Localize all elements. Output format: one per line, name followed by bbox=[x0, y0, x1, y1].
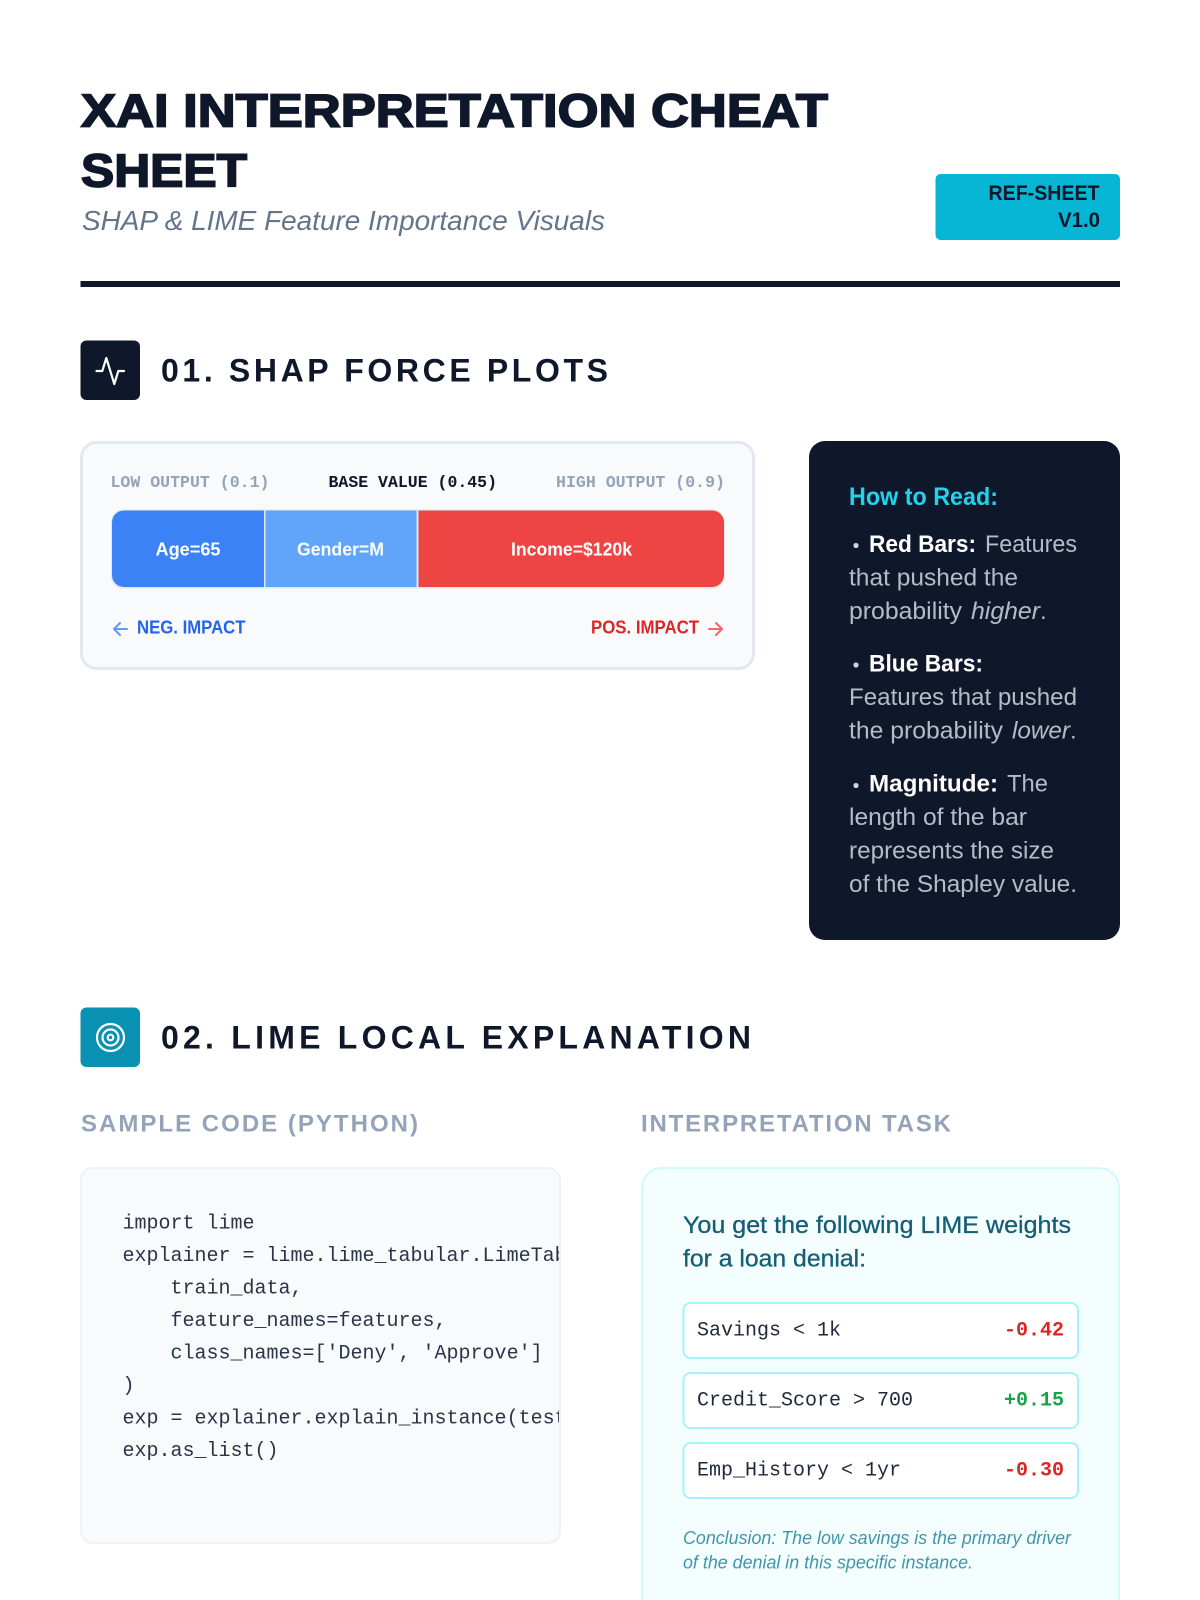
red bars note: that pushed the bbox=[849, 564, 1018, 592]
scale labels: HIGH OUTPUT (0.9) bbox=[556, 473, 725, 492]
red bars note: higher bbox=[971, 598, 1041, 625]
code block: import lime bbox=[122, 1212, 255, 1236]
panel heading: How to Read: bbox=[849, 483, 998, 511]
code block: ) bbox=[122, 1375, 135, 1398]
magnitude note: of the Shapley value. bbox=[849, 871, 1077, 898]
conclusion note bbox=[683, 1528, 1072, 1572]
section heading: SHAP force plots bbox=[80, 340, 608, 400]
code block: explainer = lime.lime_tabular.LimeTabularExplainer( bbox=[122, 1245, 735, 1268]
panel: SHAP force plot bbox=[82, 442, 754, 668]
weight row: employment history: Emp_History < 1yr bbox=[697, 1460, 901, 1482]
blue bars note: Features that pushed bbox=[849, 684, 1077, 711]
scale labels bbox=[110, 473, 725, 492]
legend: negative impact: NEG. IMPACT bbox=[137, 616, 246, 638]
code block bbox=[124, 1214, 559, 1460]
weight row: credit score bbox=[684, 1373, 1078, 1428]
code block: class_names=['Deny', 'Approve'] bbox=[122, 1342, 543, 1366]
conclusion note: Conclusion: The low savings is the primary driver bbox=[683, 1528, 1072, 1548]
weight row: employment history: -0.30 bbox=[1004, 1460, 1064, 1482]
column heading: sample code: SAMPLE CODE (PYTHON) bbox=[81, 1110, 418, 1138]
title bbox=[81, 84, 828, 196]
force bar bbox=[111, 510, 725, 588]
panel: sample code bbox=[80, 1167, 561, 1544]
red bars note: . bbox=[1040, 598, 1047, 625]
section heading: LIME local explanation bbox=[80, 1008, 751, 1067]
icon: target bbox=[80, 1008, 140, 1067]
magnitude note: represents the size bbox=[849, 838, 1054, 864]
task prompt: for a loan denial: bbox=[683, 1246, 866, 1272]
weight row: credit score: +0.15 bbox=[1004, 1390, 1064, 1412]
red bars note: Red Bars: bbox=[869, 531, 976, 558]
red bars note bbox=[849, 531, 1077, 625]
weight row: savings bbox=[684, 1303, 1078, 1358]
blue bars note: the probability bbox=[849, 718, 1003, 744]
subtitle: SHAP & LIME Feature Importance Visuals bbox=[82, 205, 605, 236]
version badge bbox=[936, 174, 1120, 240]
code block: train_data, bbox=[122, 1278, 303, 1300]
weight row: savings: Savings < 1k bbox=[697, 1320, 841, 1342]
version badge: REF-SHEET bbox=[988, 182, 1100, 205]
weight row: savings: -0.42 bbox=[1004, 1320, 1064, 1342]
title: XAI INTERPRETATION CHEAT bbox=[81, 84, 828, 136]
blue bars note: lower bbox=[1012, 718, 1071, 744]
heading text: 01. SHAP FORCE PLOTS bbox=[161, 352, 608, 388]
blue bars note bbox=[849, 650, 1077, 744]
icon: activity pulse bbox=[80, 340, 140, 400]
segment: Gender: Gender=M bbox=[297, 540, 384, 560]
heading text: 02. LIME LOCAL EXPLANATION bbox=[161, 1020, 751, 1056]
red bars note: probability bbox=[849, 598, 962, 625]
code block: feature_names=features, bbox=[122, 1310, 447, 1333]
panel: how to read bbox=[809, 441, 1120, 940]
panel: interpretation task bbox=[642, 1168, 1119, 1600]
title: SHEET bbox=[81, 144, 247, 196]
magnitude note bbox=[849, 770, 1077, 898]
magnitude note: length of the bar bbox=[849, 804, 1027, 831]
blue bars note: . bbox=[1070, 718, 1077, 744]
segment: Age: Age=65 bbox=[156, 540, 220, 560]
segment: Income: Income=$120k bbox=[511, 540, 633, 560]
weight row: credit score: Credit_Score > 700 bbox=[697, 1390, 913, 1412]
magnitude note: Magnitude: bbox=[869, 770, 998, 798]
version badge: V1.0 bbox=[1058, 209, 1100, 232]
code block: exp = explainer.explain_instance(test_row, model.predict_proba) bbox=[122, 1408, 879, 1430]
blue bars note: Blue Bars: bbox=[869, 650, 983, 678]
magnitude note: The bbox=[1007, 770, 1048, 798]
code block: exp.as_list() bbox=[122, 1440, 279, 1463]
conclusion note: of the denial in this specific instance. bbox=[683, 1552, 973, 1572]
scale labels: BASE VALUE (0.45) bbox=[328, 473, 497, 492]
task prompt bbox=[683, 1212, 1071, 1272]
header bbox=[80, 84, 1120, 287]
weight row: employment history bbox=[684, 1443, 1078, 1498]
legend: positive impact: POS. IMPACT bbox=[591, 616, 700, 638]
column heading: interpretation task: INTERPRETATION TASK bbox=[641, 1110, 952, 1138]
scale labels: LOW OUTPUT (0.1) bbox=[110, 473, 270, 492]
task prompt: You get the following LIME weights bbox=[683, 1212, 1071, 1239]
red bars note: Features bbox=[985, 531, 1077, 558]
